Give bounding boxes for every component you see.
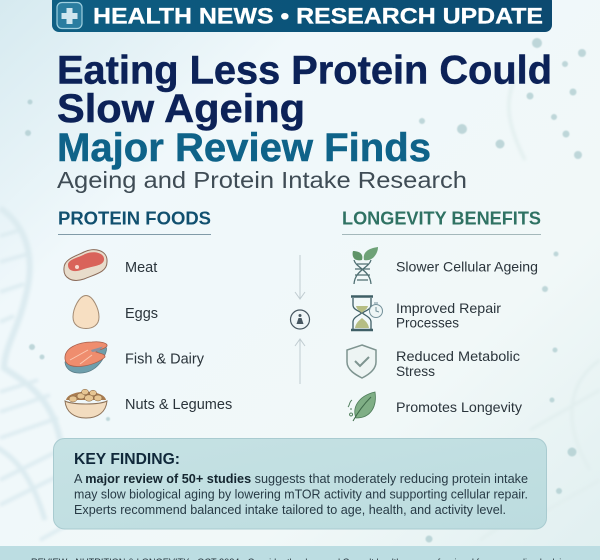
icon: egg bbox=[73, 296, 99, 328]
background: DNA helix left bbox=[0, 208, 130, 540]
heading: protein foods: PROTEIN FOODS bbox=[58, 208, 211, 228]
label: meat: Meat bbox=[125, 260, 157, 276]
title bbox=[57, 48, 552, 170]
label: reduced metabolic stress: Reduced Metabolic bbox=[396, 348, 520, 364]
icon: fish bbox=[65, 342, 107, 373]
subtitle: Ageing and Protein Intake Research bbox=[57, 167, 467, 193]
icon: meat bbox=[64, 250, 107, 280]
heading: longevity benefits: LONGEVITY BENEFITS bbox=[342, 208, 541, 228]
panel: key finding bbox=[54, 438, 546, 529]
label: nuts and legumes: Nuts & Legumes bbox=[125, 397, 232, 413]
key finding body: A major review of 50+ studies suggests that moderately reducing protein intake bbox=[74, 472, 528, 486]
label: slower cellular ageing: Slower Cellular Ageing bbox=[396, 258, 538, 274]
title accent line: Major Review Finds bbox=[57, 126, 431, 170]
label: improved repair processes: Processes bbox=[396, 314, 459, 330]
panel: longevity benefits bbox=[342, 208, 541, 421]
key finding body: may slow biological aging by lowering mTOR activity and supporting cellular repair. bbox=[74, 488, 528, 502]
icon: dna with leaves bbox=[353, 247, 378, 284]
key finding body: Experts recommend balanced intake tailored to age, health, and activity level. bbox=[74, 503, 506, 517]
key finding heading: KEY FINDING: bbox=[74, 451, 180, 468]
banner text: HEALTH NEWS • RESEARCH UPDATE bbox=[93, 4, 543, 28]
icon: medical cross badge bbox=[57, 2, 82, 28]
key finding body bbox=[74, 472, 528, 517]
panel: protein foods bbox=[58, 208, 232, 418]
icon: bowl of nuts bbox=[65, 389, 107, 418]
label: improved repair processes: Improved Repair bbox=[396, 300, 501, 316]
title: Eating Less Protein Could bbox=[57, 48, 552, 92]
label: eggs: Eggs bbox=[125, 306, 158, 322]
title: Slow Ageing bbox=[57, 87, 305, 131]
label: promotes longevity: Promotes Longevity bbox=[396, 399, 522, 415]
icon: hourglass with clock bbox=[351, 296, 382, 330]
arrow: up to centre bbox=[295, 339, 305, 384]
icon: shield with check bbox=[347, 345, 376, 378]
label: reduced metabolic stress: Stress bbox=[396, 363, 435, 379]
footer band bbox=[0, 546, 600, 560]
icon: leaf bbox=[348, 392, 375, 421]
label: fish and dairy: Fish & Dairy bbox=[125, 352, 205, 368]
top banner bbox=[52, 0, 552, 32]
label: reduced metabolic stress bbox=[396, 348, 520, 379]
icon: centre info badge bbox=[290, 310, 310, 329]
background: DNA helix right bbox=[480, 70, 600, 540]
arrow: down to centre bbox=[295, 255, 305, 299]
label: improved repair processes bbox=[396, 300, 501, 330]
